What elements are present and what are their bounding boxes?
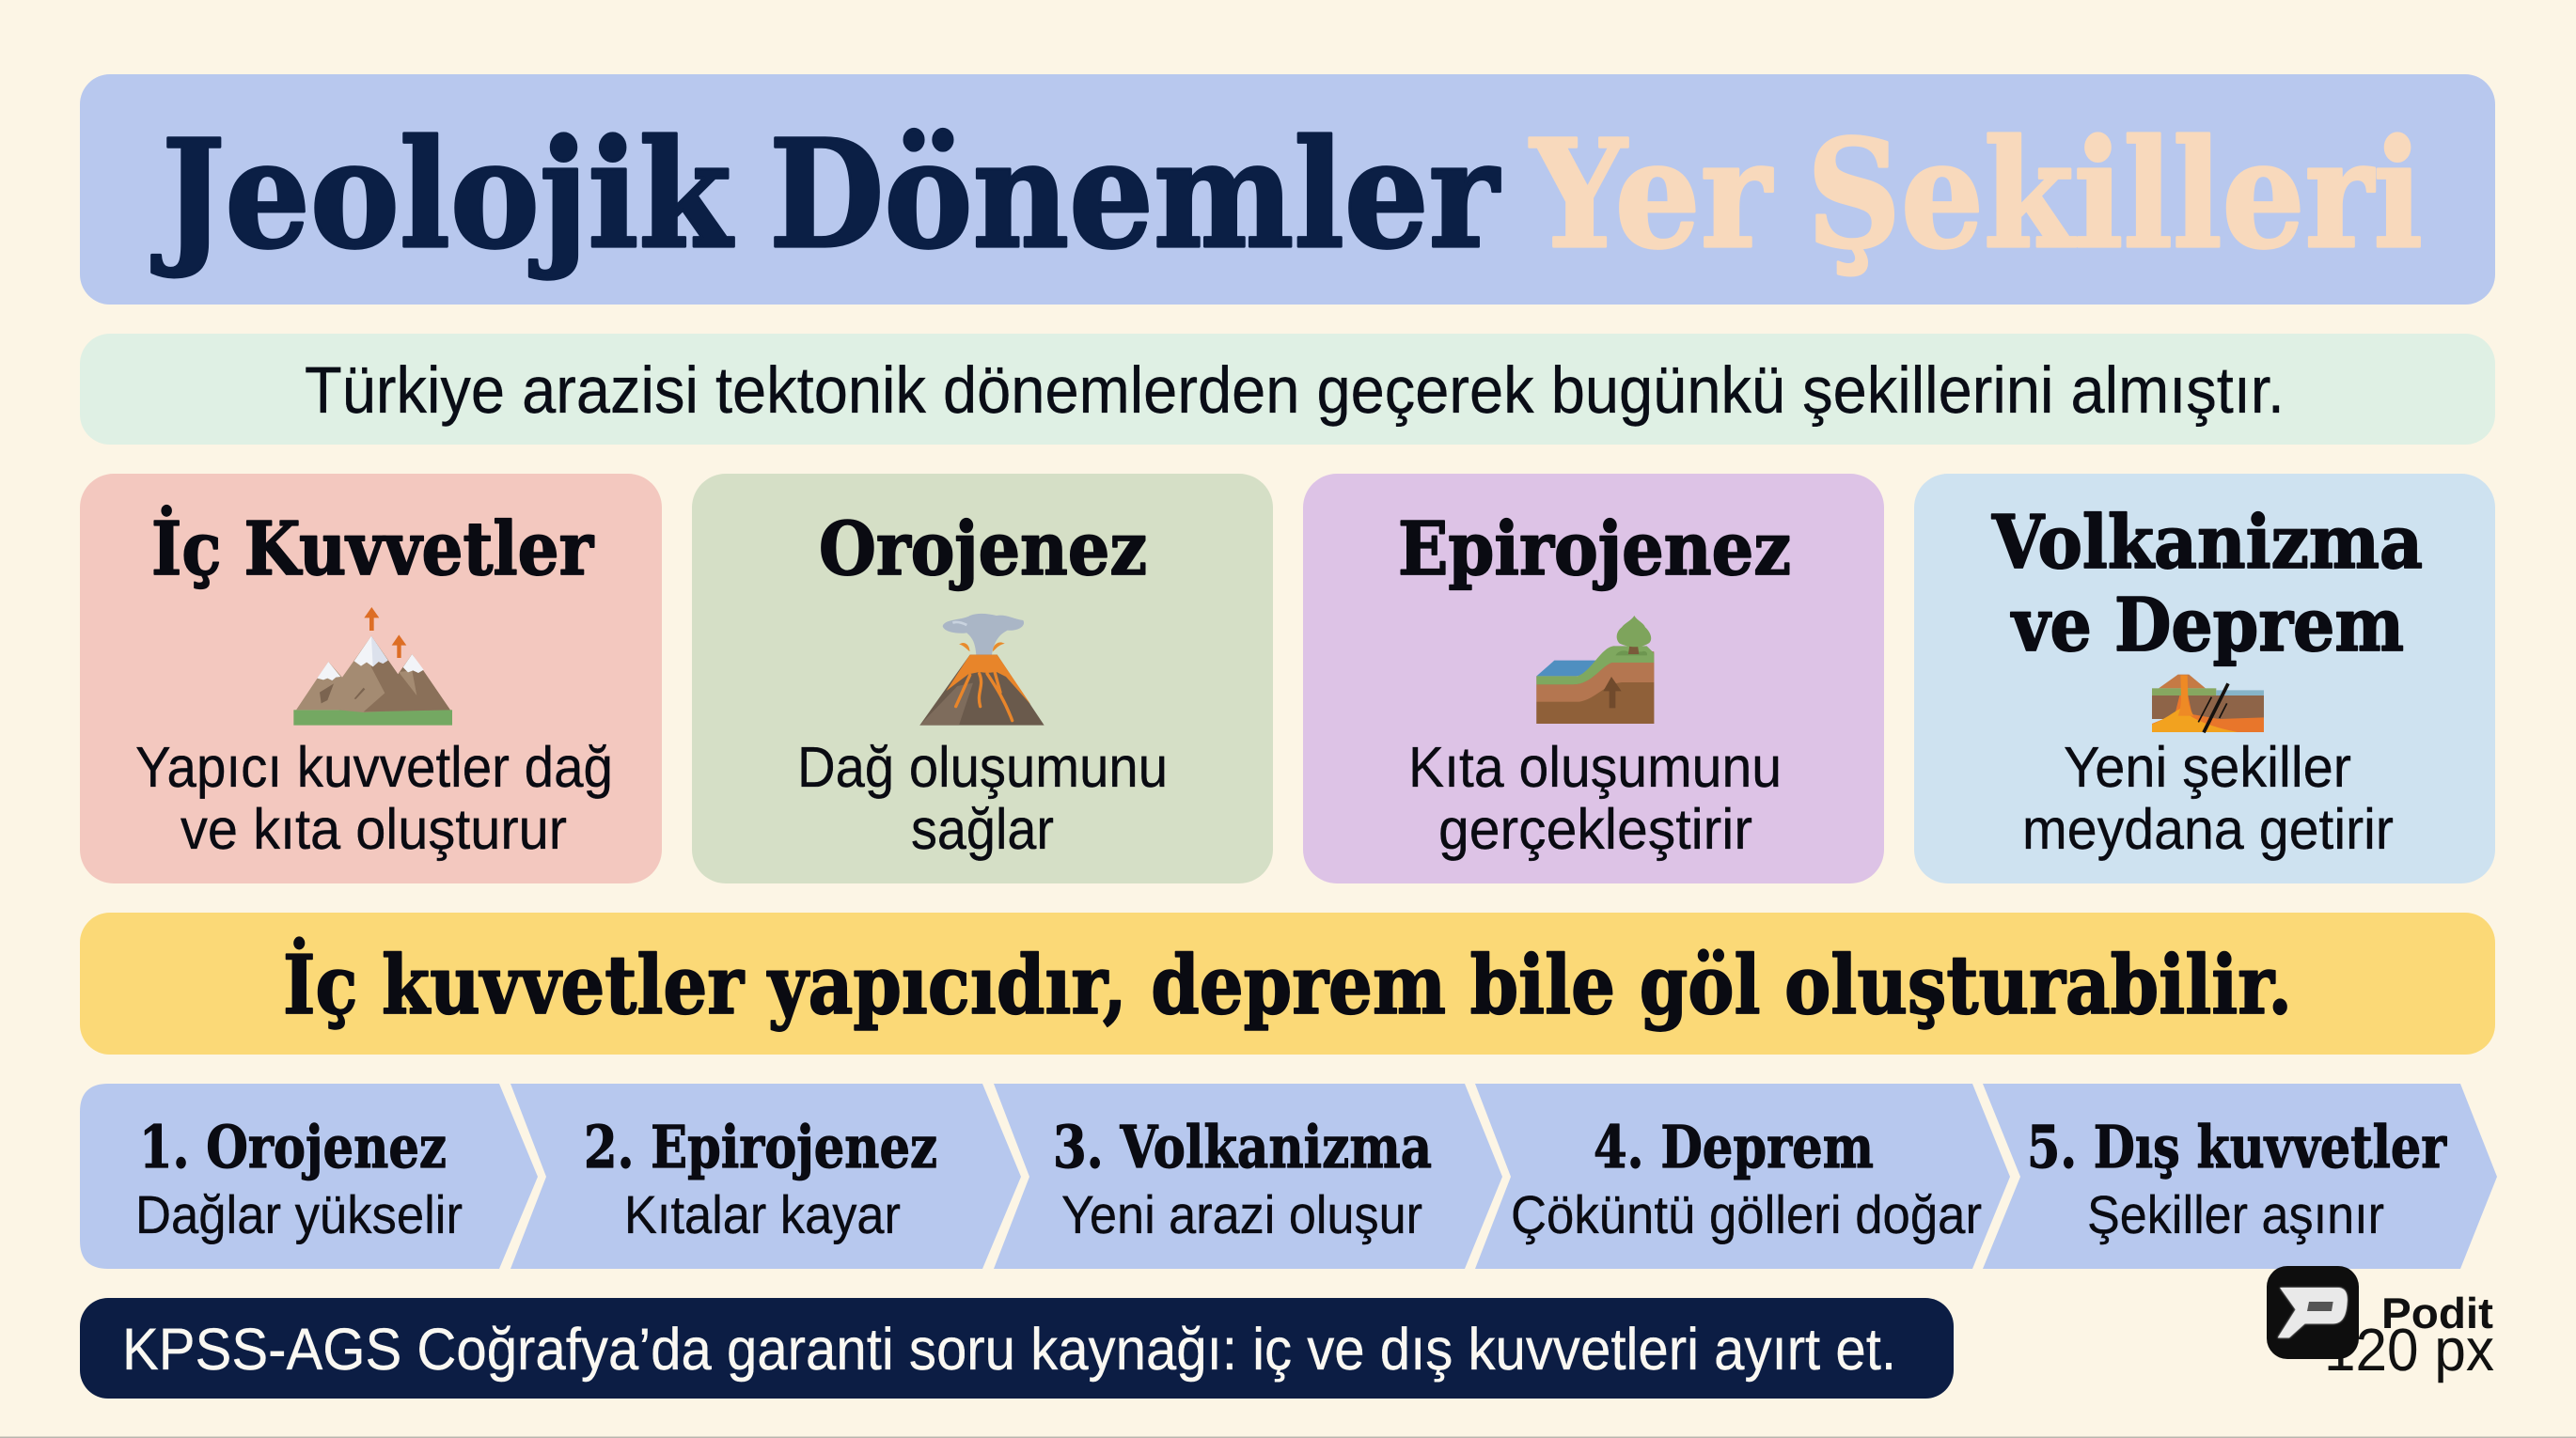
- text: Yeni şekiller: Yeni şekiller: [2064, 735, 2351, 799]
- step 1: Orojenez: Dağlar yükselir: [135, 1185, 463, 1245]
- step 3: Volkanizma: 3. Volkanizma: [1053, 1113, 1432, 1181]
- logo: Podit mark: [2267, 1266, 2359, 1359]
- text: gerçekleştirir: gerçekleştirir: [1438, 797, 1752, 861]
- step 2: Epirojenez: Kıtalar kayar: [624, 1185, 901, 1245]
- icon: uplifted crust block: [1536, 616, 1654, 724]
- title: Jeolojik Dönemler: Dönemler: [769, 108, 1500, 282]
- step 1: Orojenez: 1. Orojenez: [139, 1113, 447, 1181]
- subtitle strip: [80, 334, 2495, 445]
- watermark: 120 px: 120 px: [2324, 1316, 2494, 1383]
- text: Yapıcı kuvvetler dağ: Yapıcı kuvvetler dağ: [135, 735, 613, 799]
- step 1: Orojenez: [80, 1084, 538, 1269]
- subtitle strip: Türkiye arazisi tektonik dönemlerden geçerek bugünkü şekillerini almıştır.: [305, 353, 2285, 427]
- title: Yer Şekilleri: Şekilleri: [1807, 108, 2423, 282]
- step 5: Dış kuvvetler: Şekiller aşınır: [2087, 1185, 2384, 1245]
- step 2: Epirojenez: [510, 1084, 1021, 1269]
- text: Dağ oluşumunu: Dağ oluşumunu: [797, 735, 1168, 799]
- icon: volcano and fault cross-section: [2152, 675, 2264, 732]
- heading: Volkanizma: Volkanizma: [1991, 500, 2423, 586]
- panel: Volkanizma ve Deprem: [1914, 474, 2495, 883]
- title: Jeolojik Dönemler: [151, 108, 1500, 282]
- icon: volcano: [919, 614, 1045, 726]
- step 2: Epirojenez: 2. Epirojenez: [584, 1113, 937, 1181]
- step 4: Deprem: Çöküntü gölleri doğar: [1511, 1185, 1982, 1245]
- panel: İç Kuvvetler: [80, 474, 662, 883]
- step 4: Deprem: 4. Deprem: [1594, 1113, 1874, 1181]
- dark exam tip bar: KPSS-AGS Coğrafya’da garanti soru kaynağı: iç ve dış kuvvetleri ayırt et.: [122, 1317, 1896, 1383]
- step 3: Volkanizma: [994, 1084, 1502, 1269]
- arrow: up small: [392, 634, 406, 658]
- text: meydana getirir: meydana getirir: [2022, 797, 2394, 861]
- title banner: [80, 74, 2495, 305]
- logo text: Podit: Podit: [2381, 1289, 2493, 1337]
- heading: ve Deprem: ve Deprem: [2010, 583, 2404, 668]
- title: Jeolojik Dönemler: Jeolojik: [151, 108, 734, 282]
- title: Yer Şekilleri: Yer: [1529, 108, 1773, 282]
- yellow key message banner: İç kuvvetler yapıcıdır, deprem bile göl oluşturabilir.: [283, 937, 2292, 1033]
- step 3: Volkanizma: Yeni arazi oluşur: [1061, 1185, 1422, 1245]
- text: ve kıta oluşturur: ve kıta oluşturur: [181, 797, 567, 861]
- panel: Epirojenez: [1303, 474, 1884, 883]
- arrow: up large: [364, 607, 379, 631]
- title: Yer Şekilleri: [1529, 108, 2423, 282]
- process chevrons: [80, 1084, 2497, 1269]
- icon: rising mountains: [293, 607, 452, 726]
- heading: Epirojenez: Epirojenez: [1398, 507, 1791, 592]
- step 4: Deprem: [1475, 1084, 2010, 1269]
- heading: Orojenez: Orojenez: [819, 507, 1147, 592]
- text: Kıta oluşumunu: Kıta oluşumunu: [1408, 735, 1782, 799]
- step 5: Dış kuvvetler: [1983, 1084, 2497, 1269]
- step 5: Dış kuvvetler: 5. Dış kuvvetler: [2027, 1113, 2447, 1181]
- yellow key message banner: [80, 913, 2495, 1055]
- heading: İç Kuvvetler: İç Kuvvetler: [151, 505, 594, 592]
- panel: Orojenez: [692, 474, 1273, 883]
- text: sağlar: sağlar: [911, 797, 1054, 861]
- dark exam tip bar: [80, 1298, 1954, 1399]
